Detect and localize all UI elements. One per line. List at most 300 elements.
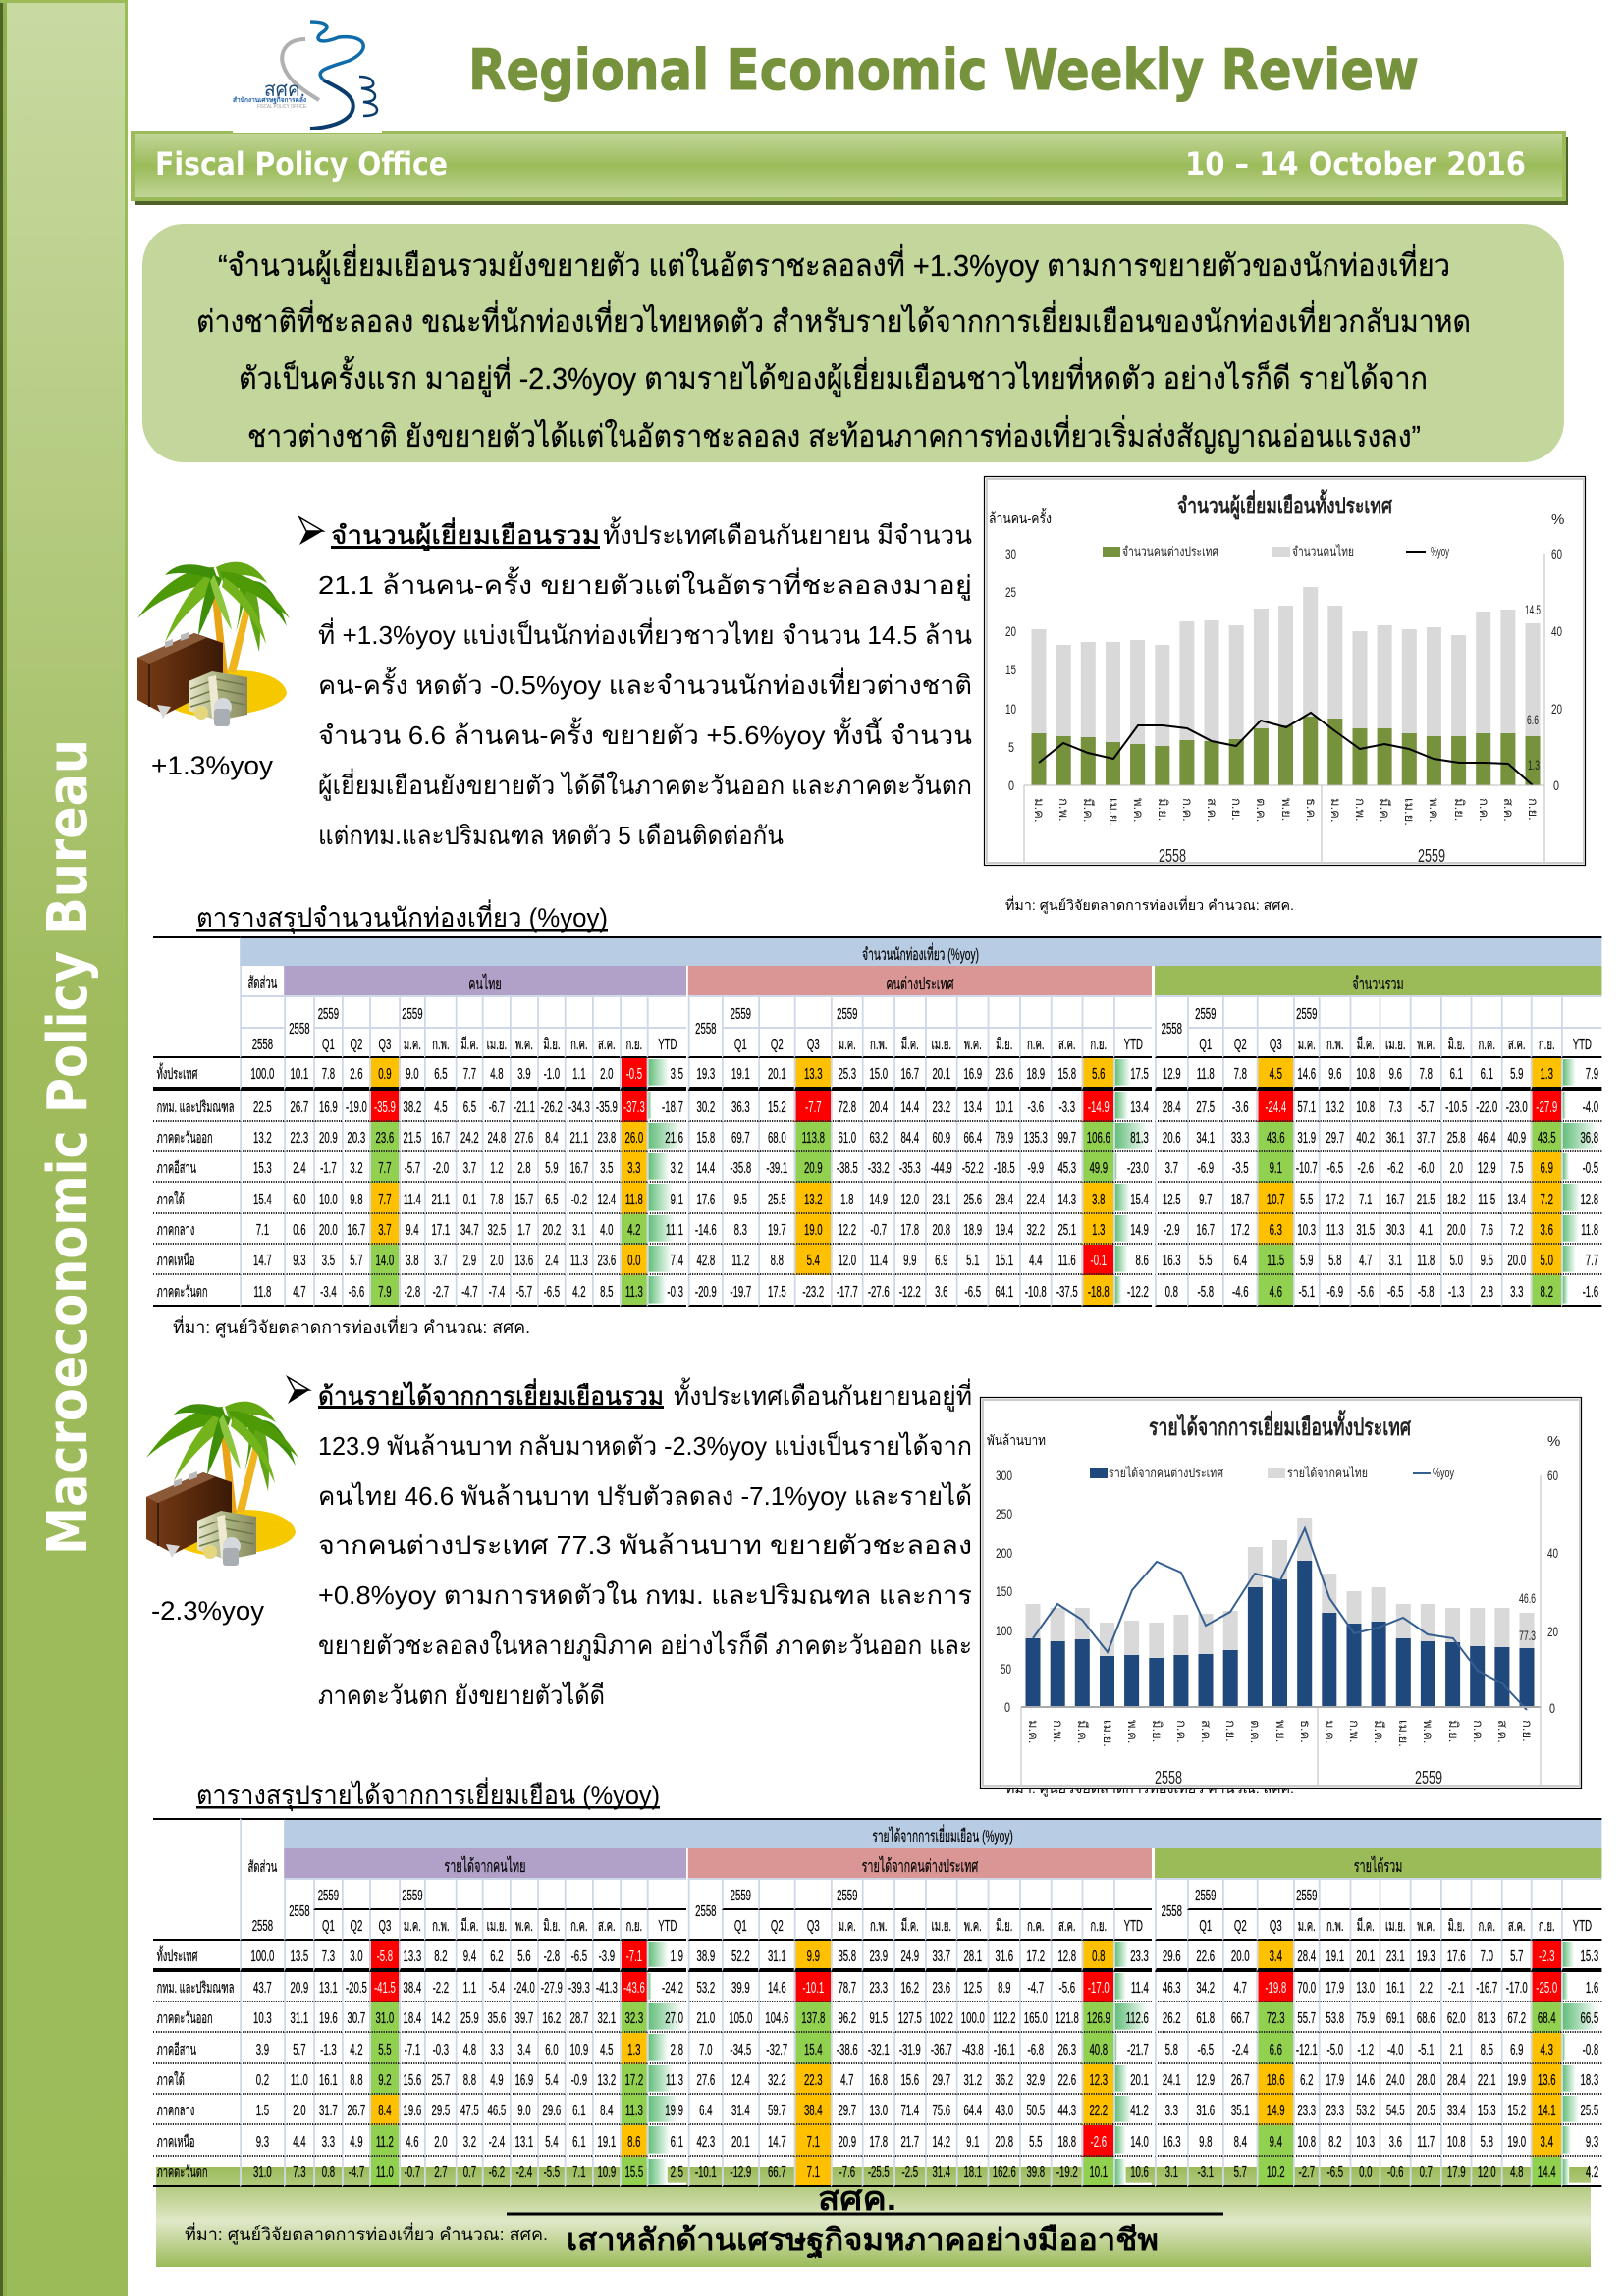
table row: North: 9.3 bbox=[256, 2134, 269, 2150]
table row: East: 21.0 bbox=[696, 2010, 715, 2027]
table row: West: -1.6 bbox=[1583, 1284, 1598, 1300]
table row: North: 12.0 bbox=[838, 1253, 856, 1269]
table header: period row: ม.ค. bbox=[1298, 1037, 1316, 1052]
table row: Bangkok and vicinity: 34.2 bbox=[1196, 1980, 1215, 1997]
chart: revenue stacked bars: 2558 bbox=[1155, 1768, 1182, 1788]
table row: Central: 20.2 bbox=[543, 1222, 561, 1239]
table row: South: -0.9 bbox=[571, 2072, 587, 2089]
table row: North: 11.8 bbox=[1417, 1253, 1435, 1269]
table row: Bangkok and vicinity: -3.3 bbox=[1059, 1099, 1075, 1115]
table row: Bangkok and vicinity: 2.2 bbox=[1420, 1980, 1433, 1997]
chart: revenue stacked bars: เม.ย. bbox=[1101, 1720, 1115, 1747]
text block: visitors: ที่ +1.3%yoy แบ่งเป็นนักท่องเที่ยวชาวไทย จำนวน 14.5 ล้าน bbox=[318, 617, 972, 650]
table row: East: 32.1 bbox=[598, 2010, 616, 2027]
footer band: สศค. bbox=[818, 2180, 896, 2217]
table row: South: 14.9 bbox=[869, 1192, 888, 1207]
table row: East bbox=[153, 2002, 1602, 2033]
table row: Bangkok and vicinity: 23.6 bbox=[932, 1980, 950, 1997]
table row: North: 3.8 bbox=[406, 1253, 419, 1269]
table header: year row: 2559 bbox=[318, 1005, 339, 1023]
table row: nationwide: 18.9 bbox=[1026, 1066, 1045, 1083]
table row: South: 9.7 bbox=[1199, 1192, 1212, 1207]
chart: visitors stacked bars: จำนวนคนต่างประเทศ bbox=[1122, 544, 1219, 559]
table row: nationwide: 17.5 bbox=[1130, 1066, 1149, 1083]
table row: West: -2.7 bbox=[433, 1284, 449, 1300]
table row: West: -37.5 bbox=[1056, 1284, 1078, 1300]
table row: Central: 1.5 bbox=[256, 2103, 269, 2119]
table row: West: -3.1 bbox=[1198, 2164, 1214, 2181]
table row: East: 15.8 bbox=[696, 1130, 715, 1147]
table row: nationwide: 7.8 bbox=[1420, 1066, 1433, 1083]
table header: period row: เม.ย. bbox=[487, 1918, 507, 1935]
table row: Central bbox=[153, 1214, 1602, 1245]
table row: Northeast: -12.1 bbox=[1296, 2042, 1318, 2057]
table row: East: 69.1 bbox=[1386, 2010, 1405, 2027]
table row: South: 18.2 bbox=[1447, 1192, 1466, 1207]
table: tourism revenue %yoy: สัดส่วน bbox=[247, 1859, 277, 1875]
table row: Bangkok and vicinity: -24.0 bbox=[514, 1980, 535, 1997]
chart: visitors stacked bars: ม.ค. bbox=[1328, 798, 1343, 823]
table row: nationwide: 19.1 bbox=[731, 1066, 750, 1083]
table row: Northeast: 20.9 bbox=[804, 1160, 823, 1177]
table row: North: 20.9 bbox=[838, 2134, 856, 2150]
table header: period row: พ.ค. bbox=[515, 1918, 533, 1935]
table row: nationwide: 33.7 bbox=[932, 1948, 950, 1965]
table row: South: 4.9 bbox=[490, 2072, 504, 2089]
table row: Central: 6.4 bbox=[699, 2103, 713, 2119]
source note for chart 1: ที่มา: ศูนย์วิจัยตลาดการท่องเที่ยว คำนวณ: สศค. bbox=[1005, 896, 1294, 914]
table row: South: 0.1 bbox=[463, 1192, 476, 1207]
table row: West: 8.2 bbox=[1541, 1284, 1553, 1300]
table row: West: -0.6 bbox=[1387, 2164, 1404, 2181]
table row: Northeast: 1.2 bbox=[490, 1160, 504, 1177]
table row: West: -10.1 bbox=[695, 2164, 717, 2181]
chart: revenue stacked bars: ก.ค. bbox=[1471, 1720, 1486, 1743]
table header: period row: Q1 bbox=[734, 1037, 747, 1052]
table row: Northeast: -38.6 bbox=[837, 2042, 858, 2057]
footer band: ที่มา: ศูนย์วิจัยตลาดการท่องเที่ยว คำนวณ: สศค. bbox=[185, 2222, 548, 2245]
table row: North: 4.4 bbox=[1029, 1253, 1042, 1269]
table header: period row: ก.พ. bbox=[432, 1037, 450, 1052]
table row: East: 61.8 bbox=[1196, 2010, 1215, 2027]
chart: visitors stacked bars: 2558 bbox=[1159, 846, 1186, 866]
table header: period row: มี.ค. bbox=[1357, 1918, 1375, 1935]
table row: North: 5.5 bbox=[1199, 1253, 1212, 1269]
table row: North bbox=[153, 1245, 1602, 1275]
table row: Bangkok and vicinity: -25.0 bbox=[1536, 1980, 1557, 1997]
table header: period row: มิ.ย. bbox=[996, 1918, 1012, 1935]
table row: South: 12.4 bbox=[731, 2072, 750, 2089]
table row: North: 9.4 bbox=[1270, 2134, 1282, 2150]
table row: South: 12.3 bbox=[1089, 2072, 1108, 2089]
table row: North: 3.4 bbox=[1541, 2134, 1553, 2150]
table row: North: 5.5 bbox=[1029, 2134, 1042, 2150]
table row: East: 36.8 bbox=[1580, 1130, 1598, 1147]
table row: nationwide: 6.2 bbox=[490, 1948, 504, 1965]
table row: South: 31.2 bbox=[963, 2072, 982, 2089]
table row: West: -6.5 bbox=[544, 1284, 560, 1300]
table row: Northeast: -52.2 bbox=[962, 1160, 984, 1177]
table row: nationwide: 7.9 bbox=[1586, 1066, 1598, 1083]
table row: West: -23.2 bbox=[802, 1284, 824, 1300]
table row: nationwide: 22.6 bbox=[1196, 1948, 1215, 1965]
table row: West: 10.9 bbox=[598, 2164, 616, 2181]
table header: period row: พ.ค. bbox=[1417, 1918, 1435, 1935]
chart: revenue stacked bars: 20 bbox=[1547, 1624, 1558, 1639]
table row: North: 8.6 bbox=[1136, 1253, 1149, 1269]
table row: Northeast: 4.8 bbox=[463, 2042, 476, 2057]
table row: West: 4.2 bbox=[572, 1284, 586, 1300]
table row: South: 23.1 bbox=[932, 1192, 950, 1207]
text block: visitors: 21.1 ล้านคน-ครั้ง ขยายตัวแต่ในอัตราที่ชะลอลงมาอยู่ bbox=[318, 566, 972, 601]
table row: Central: 8.3 bbox=[734, 1222, 747, 1239]
chart: visitors stacked bars: ม.ค. bbox=[1032, 798, 1047, 823]
table row: Central: 9.4 bbox=[406, 1222, 419, 1239]
table row: South: 20.1 bbox=[1130, 2072, 1149, 2089]
table row: Bangkok and vicinity: 23.2 bbox=[932, 1099, 950, 1115]
table row: West bbox=[153, 2157, 1602, 2187]
table row: nationwide: 20.1 bbox=[768, 1066, 786, 1083]
table row: North: 2.0 bbox=[434, 2134, 448, 2150]
table row: nationwide: 31.1 bbox=[768, 1948, 786, 1965]
table row: West: -12.9 bbox=[730, 2164, 751, 2181]
table row: North: 3.1 bbox=[1389, 1253, 1402, 1269]
table row: West: 15.5 bbox=[624, 2164, 643, 2181]
table row: Bangkok and vicinity: -4.0 bbox=[1583, 1099, 1598, 1115]
table row: South: 13.6 bbox=[1538, 2072, 1556, 2089]
table row: East: 105.0 bbox=[729, 2010, 752, 2027]
table row: South: 15.4 bbox=[1130, 1192, 1149, 1207]
table header: group bands: คนไทย bbox=[468, 974, 502, 993]
table row: South: 18.3 bbox=[1581, 2072, 1598, 2089]
table row: West: -12.2 bbox=[899, 1284, 921, 1300]
table row: Northeast: 7.0 bbox=[699, 2042, 713, 2057]
chart: revenue stacked bars: ธ.ค. bbox=[1298, 1720, 1313, 1743]
table row: East: 27.6 bbox=[515, 1130, 533, 1147]
table row: North: 6.1 bbox=[572, 2134, 586, 2150]
table row: North: 19.0 bbox=[1507, 2134, 1526, 2150]
table header: year row bbox=[284, 1880, 1602, 1941]
table row: Central: 25.5 bbox=[1581, 2103, 1598, 2119]
table row: South: 11.3 bbox=[666, 2072, 683, 2089]
table row: Central: 59.7 bbox=[768, 2103, 786, 2119]
table row: Central: 3.1 bbox=[572, 1222, 586, 1239]
text block: visitors: จำนวนผู้เยี่ยมเยือนรวม bbox=[331, 517, 600, 551]
table row: Central: 6.3 bbox=[1270, 1222, 1282, 1239]
table row: West: 3.6 bbox=[935, 1284, 947, 1300]
table row: West: -20.9 bbox=[695, 1284, 717, 1300]
chart: visitors stacked bars: ก.พ. bbox=[1353, 798, 1368, 822]
table row: nationwide: 100.0 bbox=[250, 1948, 274, 1965]
table row: East: 37.7 bbox=[1417, 1130, 1435, 1147]
table header: year row: 2559 bbox=[402, 1005, 423, 1023]
table row: Northeast: -1.7 bbox=[320, 1160, 337, 1177]
table row: nationwide: 20.0 bbox=[1231, 1948, 1250, 1965]
table row: Bangkok and vicinity: -10.5 bbox=[1445, 1099, 1467, 1115]
table header: title band: รายได้จากการเยี่ยมเยือน (%yoy) bbox=[872, 1827, 1013, 1845]
table row: West: -5.6 bbox=[1357, 1284, 1374, 1300]
table row: Northeast: -35.8 bbox=[730, 1160, 751, 1177]
table row: Northeast: 14.4 bbox=[696, 1160, 715, 1177]
table row: West: -6.9 bbox=[1326, 1284, 1343, 1300]
table row: nationwide: 8.2 bbox=[434, 1948, 448, 1965]
table row: nationwide: 2.6 bbox=[350, 1066, 363, 1083]
table row: Bangkok and vicinity: 10.1 bbox=[995, 1099, 1013, 1115]
table row: South: 8.8 bbox=[463, 2072, 476, 2089]
chart: revenue stacked bars: 150 bbox=[996, 1583, 1012, 1599]
table row: nationwide: 10.1 bbox=[291, 1066, 308, 1083]
table row: West: 2.5 bbox=[671, 2164, 683, 2181]
table header: period row: Q3 bbox=[1270, 1918, 1282, 1935]
table row: North: 11.5 bbox=[1267, 1253, 1284, 1269]
table row: South: 25.7 bbox=[432, 2072, 450, 2089]
table row: Central: 23.3 bbox=[1297, 2103, 1316, 2119]
table row: Northeast: 49.9 bbox=[1089, 1160, 1108, 1177]
table row: South bbox=[153, 2064, 1602, 2095]
chart: revenue stacked bars: พ.ค. bbox=[1421, 1720, 1435, 1743]
table row: nationwide: 12.8 bbox=[1057, 1948, 1076, 1965]
table row: Central: 41.2 bbox=[1130, 2103, 1149, 2119]
table row: Central: 11.3 bbox=[625, 2103, 643, 2119]
chart: visitors stacked bars: เม.ย. bbox=[1107, 798, 1121, 826]
table row: Bangkok and vicinity: -27.9 bbox=[1536, 1099, 1557, 1115]
table row: South: 9.5 bbox=[734, 1192, 747, 1207]
table row: South: ภาคใต้ bbox=[157, 2072, 185, 2089]
table row: West: 17.9 bbox=[1447, 2164, 1466, 2181]
table header: period row: ส.ค. bbox=[598, 1918, 616, 1935]
icon: palm and suitcase 2 bbox=[146, 1402, 298, 1566]
table row: Central: 20.0 bbox=[1447, 1222, 1466, 1239]
table row: North: 8.8 bbox=[771, 1253, 784, 1269]
table row: West: -6.5 bbox=[1326, 2164, 1343, 2181]
table row: Bangkok and vicinity: 57.1 bbox=[1297, 1099, 1316, 1115]
table row: West: ภาคตะวันตก bbox=[157, 1284, 207, 1300]
table row: South: 36.2 bbox=[995, 2072, 1013, 2089]
chart: revenue stacked bars: ส.ค. bbox=[1199, 1720, 1214, 1743]
text block: revenue: +0.8%yoy ตามการหดตัวใน กทม. และปริมณฑล และการ bbox=[318, 1580, 972, 1610]
table row: Central: 29.6 bbox=[543, 2103, 561, 2119]
table header: period row: Q1 bbox=[322, 1037, 335, 1052]
sidebar: Macroeconomic Policy Bureau: Macroeconomic Policy Bureau bbox=[36, 739, 100, 1555]
table row: Bangkok and vicinity: -34.3 bbox=[568, 1099, 590, 1115]
table row: Bangkok and vicinity: 22.5 bbox=[253, 1099, 272, 1115]
table header: period row: พ.ค. bbox=[964, 1918, 982, 1935]
table row: East: 104.6 bbox=[765, 2010, 788, 2027]
table row: West: 4.2 bbox=[1586, 2164, 1598, 2181]
chart: revenue stacked bars: พ.ค. bbox=[1125, 1720, 1140, 1743]
table row: nationwide: 31.6 bbox=[995, 1948, 1013, 1965]
table row: East: 20.9 bbox=[319, 1130, 338, 1147]
chart: revenue stacked bars: 46.6 bbox=[1519, 1590, 1536, 1606]
table row: Northeast: -1.3 bbox=[320, 2042, 337, 2057]
table row: East bbox=[153, 1122, 1602, 1152]
table row: Bangkok and vicinity: -41.5 bbox=[374, 1980, 396, 1997]
table row: Central: 19.4 bbox=[995, 1222, 1013, 1239]
table row: South: 18.6 bbox=[1267, 2072, 1285, 2089]
table row: Bangkok and vicinity: -39.3 bbox=[568, 1980, 590, 1997]
table row: North: 19.1 bbox=[598, 2134, 616, 2150]
table row: Bangkok and vicinity: -4.7 bbox=[1028, 1980, 1044, 1997]
table row: East: 81.3 bbox=[1478, 2010, 1496, 2027]
table row: Bangkok and vicinity: -41.3 bbox=[596, 1980, 618, 1997]
table row: Central: 16.7 bbox=[1196, 1222, 1215, 1239]
table row: East: 96.2 bbox=[838, 2010, 856, 2027]
table row: East: 16.2 bbox=[543, 2010, 561, 2027]
table row: East: 46.4 bbox=[1478, 1130, 1496, 1147]
table row: West: 31.4 bbox=[932, 2164, 950, 2181]
table row: Northeast: 4.3 bbox=[1541, 2042, 1553, 2057]
table row: South: 16.9 bbox=[515, 2072, 533, 2089]
table row: East: 75.9 bbox=[1356, 2010, 1375, 2027]
table row: nationwide: 19.1 bbox=[1326, 1948, 1344, 1965]
table row: East: 40.2 bbox=[1356, 1130, 1375, 1147]
table row: South: 15.6 bbox=[900, 2072, 919, 2089]
footer band: เสาหลักด้านเศรษฐกิจมหภาคอย่างมืออาชีพ bbox=[567, 2224, 1159, 2260]
table row: South: 1.8 bbox=[840, 1192, 853, 1207]
table row: Bangkok and vicinity: -18.7 bbox=[662, 1099, 683, 1115]
table row: Northeast: ภาคอีสาน bbox=[157, 2042, 196, 2057]
table header: period row: Q2 bbox=[771, 1918, 784, 1935]
table row: Northeast: -6.5 bbox=[1198, 2042, 1214, 2057]
table row: North: 11.6 bbox=[1058, 1253, 1076, 1269]
text block: visitors: ผู้เยี่ยมเยือนยังขยายตัว ได้ดีในภาคตะวันออก และภาคตะวันตก bbox=[318, 768, 972, 801]
table header: period row: ก.ย. bbox=[1090, 1918, 1107, 1935]
table row: South: 12.5 bbox=[1163, 1192, 1181, 1207]
table header: year row bbox=[240, 997, 1602, 1058]
table row: Northeast: -6.0 bbox=[1418, 1160, 1435, 1177]
table row: nationwide: 4.8 bbox=[490, 1066, 504, 1083]
table row: nationwide: 6.1 bbox=[1481, 1066, 1493, 1083]
table row: nationwide: ทั้งประเทศ bbox=[157, 1066, 197, 1083]
chart: visitors stacked bars: ต.ค. bbox=[1254, 798, 1269, 822]
table row: East: 26.2 bbox=[1163, 2010, 1181, 2027]
table row: Bangkok and vicinity: 20.4 bbox=[869, 1099, 888, 1115]
table header: period row: มี.ค. bbox=[460, 1918, 478, 1935]
table row: Central: 7.2 bbox=[1510, 1222, 1523, 1239]
table row: Bangkok and vicinity: 8.9 bbox=[998, 1980, 1010, 1997]
table row: Northeast: 3.7 bbox=[1165, 1160, 1178, 1177]
chart: visitors stacked bars: มิ.ย. bbox=[1452, 798, 1467, 821]
table header: year row: 2559 bbox=[402, 1888, 423, 1904]
table row: Northeast: 12.9 bbox=[1478, 1160, 1496, 1177]
table row: Bangkok and vicinity: 14.4 bbox=[900, 1099, 919, 1115]
table header: period row: มี.ค. bbox=[901, 1037, 919, 1052]
table row: Bangkok and vicinity: -19.0 bbox=[346, 1099, 367, 1115]
table row: West: 0.8 bbox=[1165, 1284, 1178, 1300]
table row: East: 81.3 bbox=[1130, 1130, 1149, 1147]
icon: arrow bullet 2 bbox=[288, 1377, 309, 1404]
chart: visitors stacked bars: 15 bbox=[1005, 662, 1016, 677]
table row: Bangkok and vicinity: -43.6 bbox=[623, 1980, 645, 1997]
table row: nationwide: 0.8 bbox=[1092, 1948, 1105, 1965]
table row: Bangkok and vicinity: 13.4 bbox=[963, 1099, 982, 1115]
chart: visitors stacked bars: 2559 bbox=[1418, 846, 1445, 866]
table row: Northeast: 9.1 bbox=[1270, 1160, 1282, 1177]
table row: Bangkok and vicinity: -2.2 bbox=[433, 1980, 449, 1997]
table row: North: 8.4 bbox=[1234, 2134, 1247, 2150]
table row: North: 5.8 bbox=[1481, 2134, 1493, 2150]
table row: Northeast: -32.1 bbox=[868, 2042, 890, 2057]
chart: revenue stacked bars: %yoy bbox=[1433, 1466, 1454, 1480]
chart: revenue stacked bars: ก.พ. bbox=[1051, 1720, 1065, 1743]
table row: Central: ภาคกลาง bbox=[157, 1222, 194, 1239]
table row: Central: 19.0 bbox=[804, 1222, 823, 1239]
table row: nationwide: 6.1 bbox=[1450, 1066, 1463, 1083]
table row: nationwide: 9.6 bbox=[1389, 1066, 1402, 1083]
table row: nationwide: 19.3 bbox=[696, 1066, 715, 1083]
table header: period row: ก.ย. bbox=[625, 1037, 642, 1052]
table header: period row: เม.ย. bbox=[932, 1918, 951, 1935]
table row: Central: 20.0 bbox=[319, 1222, 338, 1239]
text block: visitors: คน-ครั้ง หดตัว -0.5%yoy และจำนวนนักท่องเที่ยวต่างชาติ bbox=[318, 667, 972, 700]
table header: period row: ส.ค. bbox=[1508, 1037, 1526, 1052]
chart: visitors stacked bars: ล้านคน-ครั้ง bbox=[989, 508, 1052, 526]
table header: year row: 2559 bbox=[1296, 1005, 1317, 1023]
table row: South: 4.7 bbox=[840, 2072, 853, 2089]
table row: East: 72.3 bbox=[1267, 2010, 1285, 2027]
table row: North: 5.0 bbox=[1541, 1253, 1553, 1269]
logo: Fiscal Policy Office swirl bbox=[233, 22, 377, 129]
table row: nationwide: 13.3 bbox=[404, 1948, 421, 1965]
chart: revenue stacked bars: ม.ค. bbox=[1323, 1720, 1337, 1743]
table row: Northeast: -38.5 bbox=[837, 1160, 858, 1177]
table row: West: 64.1 bbox=[995, 1284, 1013, 1300]
table row: East: 28.7 bbox=[570, 2010, 588, 2027]
table row: Northeast: 6.9 bbox=[1541, 1160, 1553, 1177]
table row: South: 21.1 bbox=[432, 1192, 450, 1207]
table header: period row: ส.ค. bbox=[598, 1037, 616, 1052]
table row: Central bbox=[153, 2095, 1602, 2125]
table row: North: ภาคเหนือ bbox=[157, 1253, 194, 1269]
table row: nationwide: 28.4 bbox=[1297, 1948, 1316, 1965]
table row: Bangkok and vicinity: 72.8 bbox=[838, 1099, 856, 1115]
chart: visitors stacked bars: เม.ย. bbox=[1402, 798, 1417, 826]
chart: visitors stacked bars: 5 bbox=[1008, 739, 1014, 755]
table row: Bangkok and vicinity: -21.1 bbox=[514, 1099, 535, 1115]
table row: Northeast: 5.5 bbox=[378, 2042, 392, 2057]
table row: West: -5.1 bbox=[1298, 1284, 1315, 1300]
table row: nationwide: 52.2 bbox=[731, 1948, 750, 1965]
table row: Central: 18.9 bbox=[963, 1222, 982, 1239]
text block: revenue: ภาคตะวันตก ยังขยายตัวได้ดี bbox=[318, 1681, 605, 1710]
table row: South: 16.8 bbox=[869, 2072, 888, 2089]
table row: Central: 8.4 bbox=[378, 2103, 392, 2119]
table row: South: 13.2 bbox=[598, 2072, 616, 2089]
table row: South: 32.2 bbox=[768, 2072, 786, 2089]
table header: period row: ก.ค. bbox=[570, 1037, 588, 1052]
table row: nationwide: 13.3 bbox=[804, 1066, 823, 1083]
table row: Central: 11.8 bbox=[1581, 1222, 1598, 1239]
table header: year row: 2559 bbox=[1296, 1888, 1317, 1904]
table row: nationwide: 3.5 bbox=[671, 1066, 683, 1083]
table row: Bangkok and vicinity: 16.1 bbox=[1386, 1980, 1405, 1997]
table header: period row bbox=[240, 1910, 1602, 1941]
table row: Bangkok and vicinity: 4.5 bbox=[434, 1099, 448, 1115]
table row: South: 15.7 bbox=[515, 1192, 533, 1207]
table row: nationwide: 23.6 bbox=[995, 1066, 1013, 1083]
table row: North: -2.6 bbox=[1091, 2134, 1107, 2150]
table row: South: 6.5 bbox=[545, 1192, 559, 1207]
chart: visitors stacked bars: 0 bbox=[1008, 777, 1014, 793]
table row: Central: 31.6 bbox=[1196, 2103, 1215, 2119]
table row: South: -0.2 bbox=[571, 1192, 587, 1207]
table row: East: 21.5 bbox=[404, 1130, 421, 1147]
table header: title band bbox=[153, 936, 1602, 1058]
table row: Northeast: 15.4 bbox=[804, 2042, 823, 2057]
table row: Central: 4.0 bbox=[600, 1222, 614, 1239]
table row: Bangkok and vicinity: 38.2 bbox=[404, 1099, 421, 1115]
table row: Central: 15.2 bbox=[1507, 2103, 1526, 2119]
